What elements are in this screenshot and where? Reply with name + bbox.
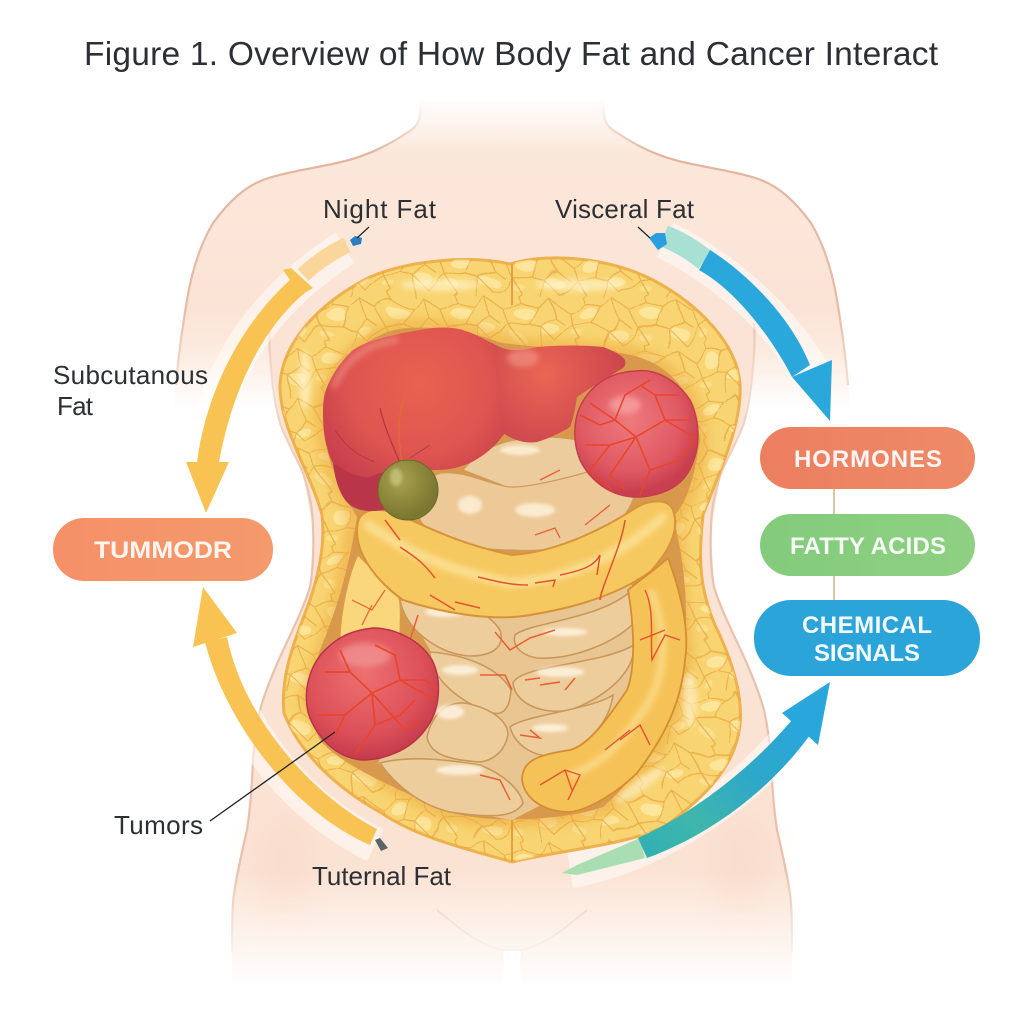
pill: fatty acids [760, 514, 975, 576]
arrow: upper left yellow [186, 236, 362, 513]
descending colon [522, 558, 686, 812]
hip shading [255, 810, 770, 910]
tumor upper right [575, 371, 698, 497]
stomach and upper bowel [420, 437, 633, 550]
arrow: lower left yellow [193, 587, 388, 851]
pill: hormones [760, 427, 975, 489]
label: tumors: Tumors [114, 810, 203, 840]
label: subcutaneous fat: Subcutanous [53, 360, 208, 390]
title: Figure 1. Overview of How Body Fat and Cancer Interact [84, 36, 939, 73]
organs [306, 327, 698, 820]
label: night fat: Night Fat [323, 194, 437, 224]
label: subcutaneous fat: Fat [57, 391, 94, 421]
pill: tumor: TUMMODR [94, 537, 232, 564]
transverse colon [357, 501, 675, 617]
abdominal cavity [311, 328, 700, 819]
liver [323, 327, 625, 511]
pill: chemical signals: CHEMICAL [802, 612, 932, 639]
skin contour lines [176, 105, 848, 993]
arrow: upper right blue [649, 233, 832, 421]
tumor lower left [306, 628, 438, 760]
body silhouette [174, 100, 850, 1010]
label: visceral fat: Visceral Fat [555, 194, 695, 224]
connector lines between pills [833, 489, 835, 600]
torso and legs [232, 100, 792, 1010]
pill: chemical signals: SIGNALS [814, 640, 920, 667]
arms and shoulders [174, 100, 850, 410]
label: tumors [114, 732, 335, 840]
soft halo around arrows [208, 240, 812, 870]
label: internal fat: Tuternal Fat [312, 861, 452, 891]
label: visceral fat [555, 194, 695, 238]
pill: hormones: HORMONES [794, 446, 942, 473]
ascending colon [340, 555, 400, 640]
arrow tail marker [375, 838, 388, 851]
label: night fat [323, 194, 437, 238]
fat layer [278, 256, 742, 864]
pill: chemical signals [754, 600, 980, 676]
arrow: lower right blue [562, 682, 830, 875]
gallbladder [378, 460, 438, 520]
small intestine [378, 585, 636, 820]
pill: fatty acids: FATTY ACIDS [790, 533, 946, 560]
pill: tumor [53, 518, 273, 581]
marker dot [350, 236, 362, 246]
marker dot [649, 233, 667, 250]
